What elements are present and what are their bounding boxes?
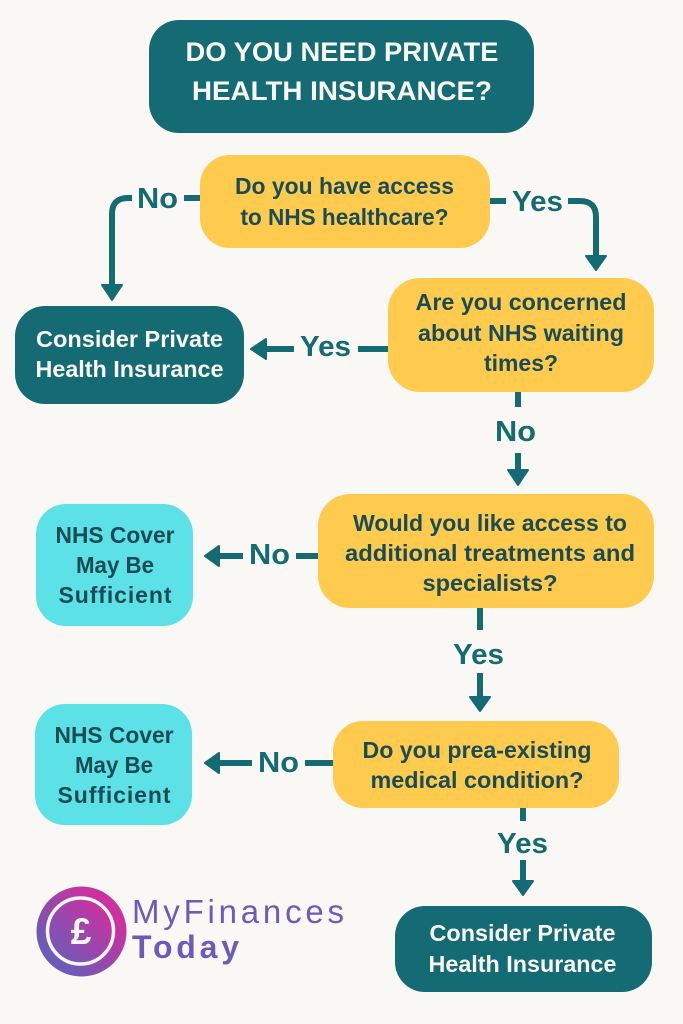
outcome: consider private health insurance: Health Insurance bbox=[428, 951, 616, 977]
outcome: NHS cover may be sufficient: NHS Cover bbox=[56, 522, 175, 548]
icon: pound coin bbox=[36, 886, 126, 976]
outcome: NHS cover may be sufficient: May Be bbox=[75, 752, 153, 778]
question: NHS access: Do you have access bbox=[235, 173, 454, 199]
outcome: NHS cover may be sufficient: Sufficient bbox=[58, 582, 172, 608]
title: DO YOU NEED PRIVATE bbox=[186, 37, 498, 67]
outcome: consider private health insurance bbox=[15, 306, 244, 404]
question: additional treatments: additional treatments and bbox=[345, 540, 635, 566]
outcome: NHS cover may be sufficient: May Be bbox=[76, 552, 154, 578]
arrow: no to NHS cover bbox=[205, 747, 333, 779]
arrow: no to NHS cover: No bbox=[258, 747, 299, 779]
arrow: yes to private insurance bbox=[497, 808, 548, 895]
arrow: yes to waiting times: Yes bbox=[512, 186, 563, 218]
question: waiting times: Are you concerned bbox=[416, 289, 626, 315]
arrow: yes to waiting times bbox=[490, 186, 606, 270]
question: waiting times bbox=[388, 278, 654, 392]
outcome: consider private health insurance: Consider Private bbox=[36, 326, 223, 352]
question: additional treatments: Would you like access to bbox=[353, 510, 627, 536]
icon: pound coin: £ bbox=[71, 911, 92, 952]
outcome: NHS cover may be sufficient bbox=[36, 504, 193, 626]
arrow: no to NHS cover bbox=[205, 539, 318, 571]
logo wordmark bbox=[132, 893, 344, 965]
arrow: no to additional treatments bbox=[495, 392, 536, 485]
arrow: no to additional treatments: No bbox=[495, 416, 536, 448]
question: pre-existing condition: Do you prea-existing bbox=[362, 737, 592, 763]
arrow: yes to pre-existing condition: Yes bbox=[453, 639, 504, 671]
arrow: no to private insurance: No bbox=[137, 183, 178, 215]
arrow: no to NHS cover: No bbox=[249, 539, 290, 571]
question: NHS access: to NHS healthcare? bbox=[240, 204, 448, 230]
outcome: NHS cover may be sufficient: NHS Cover bbox=[54, 722, 174, 748]
question: waiting times: times? bbox=[484, 350, 558, 376]
question: waiting times: about NHS waiting bbox=[418, 320, 624, 346]
logo: MyFinances Today bbox=[36, 886, 344, 976]
question: additional treatments: specialists? bbox=[422, 570, 558, 596]
outcome: NHS cover may be sufficient bbox=[35, 704, 192, 825]
question: additional treatments bbox=[318, 494, 654, 608]
arrow: yes to private insurance bbox=[251, 331, 388, 363]
arrow: yes to private insurance: Yes bbox=[497, 828, 548, 860]
arrow: yes to private insurance: Yes bbox=[300, 331, 351, 363]
arrow: no to private insurance bbox=[102, 183, 200, 300]
outcome: consider private health insurance: Health Insurance bbox=[36, 356, 224, 382]
question: NHS access bbox=[200, 155, 490, 248]
outcome: consider private health insurance: Consider Private bbox=[430, 920, 616, 946]
outcome: NHS cover may be sufficient: Sufficient bbox=[58, 782, 171, 808]
question: pre-existing condition: medical condition? bbox=[370, 767, 584, 793]
outcome: consider private health insurance bbox=[395, 906, 652, 992]
question: pre-existing condition bbox=[333, 721, 619, 808]
title: HEALTH INSURANCE? bbox=[192, 76, 492, 106]
arrow: yes to pre-existing condition bbox=[453, 608, 504, 711]
logo wordmark: Today bbox=[132, 929, 239, 965]
logo wordmark: MyFinances bbox=[132, 893, 344, 930]
title bbox=[149, 20, 534, 133]
